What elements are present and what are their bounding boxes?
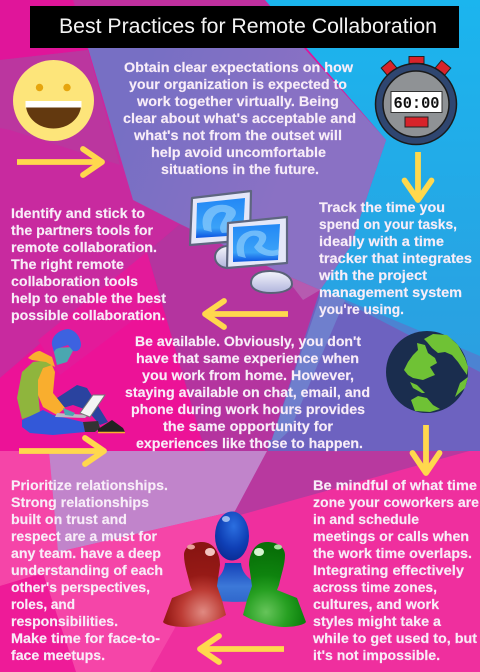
- text block: clear expectations: [123, 60, 356, 178]
- text block: track the time: you're using.: [319, 302, 404, 318]
- arrow: down from globe: [412, 425, 440, 473]
- text block: be available: phone during work hours provides: [131, 402, 365, 418]
- text block: be available: staying available on chat, email, and: [125, 385, 370, 401]
- text block: prioritize relationships: built on trust and: [11, 512, 127, 528]
- text block: time zones: [312, 478, 479, 664]
- bust: green: [243, 542, 306, 627]
- icon: smiley face: [13, 60, 94, 141]
- text block: track the time: Track the time you: [319, 200, 445, 216]
- text block: prioritize relationships: roles, and: [11, 597, 75, 613]
- text block: track the time: with the project: [318, 268, 427, 284]
- text block: prioritize relationships: respect are a must for: [11, 529, 157, 545]
- text block: be available: [125, 334, 370, 452]
- arrow: right from smiley: [17, 149, 102, 175]
- text block: time zones: meetings or calls when: [313, 529, 469, 545]
- text block: prioritize relationships: face meetups.: [11, 648, 105, 664]
- bust: blue: [205, 512, 265, 602]
- arrow: left from monitors: [205, 301, 288, 327]
- text block: clear expectations: work together virtually. Being: [136, 94, 339, 110]
- title: [30, 6, 459, 48]
- text block: clear expectations: help avoid uncomfortable: [151, 145, 326, 161]
- text block: prioritize relationships: Prioritize relationships.: [11, 478, 168, 494]
- text block: time zones: across time zones,: [313, 580, 437, 596]
- title: Best Practices for Remote Collaboration: [59, 14, 437, 38]
- text block: prioritize relationships: any team. have a deep: [11, 546, 161, 562]
- text block: clear expectations: situations in the future.: [161, 162, 319, 178]
- text block: prioritize relationships: responsibilities.: [11, 614, 118, 630]
- text block: time zones: zone your coworkers are: [313, 495, 479, 511]
- text block: time zones: Be mindful of what time: [313, 478, 477, 494]
- text block: track the time: tracker that integrates: [319, 251, 472, 267]
- text block: prioritize relationships: Strong relationships: [11, 495, 149, 511]
- text block: be available: you work from home. However,: [142, 368, 354, 384]
- text block: time zones: styles might take a: [313, 614, 441, 630]
- text block: clear expectations: what's not from the outset will: [133, 128, 342, 144]
- text block: clear expectations: your organization is expected to: [129, 77, 347, 93]
- text block: partner tools: remote collaboration.: [11, 240, 157, 256]
- icon: three user busts: [163, 512, 306, 627]
- text block: partner tools: The right remote: [11, 257, 124, 273]
- text block: partner tools: collaboration tools: [11, 274, 138, 290]
- text block: time zones: it's not impossible.: [313, 648, 440, 664]
- text block: track the time: [318, 200, 472, 318]
- text block: prioritize relationships: other's perspectives,: [11, 580, 150, 596]
- arrow: right from person: [19, 438, 104, 464]
- text block: track the time: management system: [319, 285, 462, 301]
- icon: globe: [386, 331, 468, 413]
- text block: partner tools: Identify and stick to: [11, 206, 145, 222]
- text block: be available: the same opportunity for: [163, 419, 333, 435]
- text block: partner tools: help to enable the best: [11, 291, 166, 307]
- text block: be available: experiences like those to happen.: [136, 436, 363, 452]
- text block: be available: Be available. Obviously, you don't: [135, 334, 361, 350]
- bust: red: [163, 542, 226, 627]
- text block: time zones: in and schedule: [313, 512, 419, 528]
- text block: time zones: cultures, and work: [313, 597, 439, 613]
- arrow: left to busts: [200, 636, 284, 662]
- text block: time zones: Integrating effectively: [313, 563, 464, 579]
- text block: time zones: while to get used to, but: [312, 631, 477, 647]
- illustration: person with laptop: [17, 329, 125, 435]
- text block: clear expectations: Obtain clear expectations on how: [124, 60, 354, 76]
- text block: prioritize relationships: Make time for face-to-: [11, 631, 160, 647]
- text block: be available: have that same experience when: [136, 351, 359, 367]
- text block: partner tools: the partners tools for: [11, 223, 153, 239]
- text block: partner tools: possible collaboration.: [11, 308, 165, 324]
- text block: clear expectations: clear about what's acceptable and: [123, 111, 356, 127]
- icon: stopwatch: [376, 56, 456, 144]
- icon: stopwatch: 60:00: [394, 95, 440, 114]
- icon: two computer monitors: [190, 191, 292, 293]
- text block: partner tools: [11, 206, 166, 324]
- text block: track the time: ideally with a time: [319, 234, 444, 250]
- arrow: down from stopwatch: [404, 152, 432, 200]
- text block: prioritize relationships: understanding of each: [11, 563, 163, 579]
- text block: time zones: the work time overlaps.: [313, 546, 472, 562]
- text block: prioritize relationships: [11, 478, 168, 664]
- text block: track the time: spend on your tasks,: [319, 217, 457, 233]
